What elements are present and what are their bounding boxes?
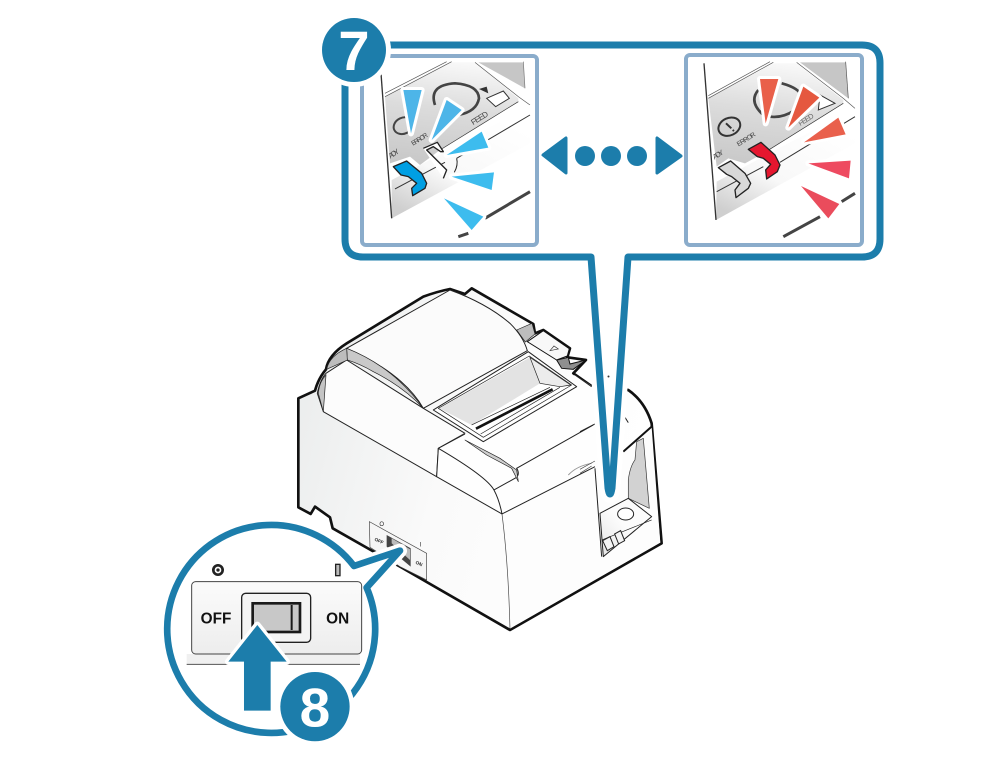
rocker switch xyxy=(242,593,311,642)
alternating arrows xyxy=(543,138,681,173)
control panel, red state xyxy=(704,62,855,237)
ready lamp off xyxy=(718,161,751,198)
control panel, blue state: ERROR xyxy=(410,132,430,147)
receipt window xyxy=(433,352,577,442)
left hinge shadow xyxy=(327,348,347,369)
power switch panel: ON xyxy=(415,560,424,568)
control panel, red state: FEED xyxy=(797,111,815,128)
printer silhouette xyxy=(298,288,662,630)
error lamp red xyxy=(748,142,780,179)
upper left housing xyxy=(317,360,465,477)
panel: error lamp flashing red xyxy=(686,55,862,245)
cover release lever xyxy=(527,331,586,369)
inset circle with pointer xyxy=(167,525,400,733)
switch plate xyxy=(187,582,362,665)
switch plate: ON xyxy=(326,610,349,627)
power switch panel: OFF xyxy=(374,537,384,545)
top cover xyxy=(347,290,527,408)
ready lamp blue xyxy=(393,161,427,196)
housing highlight fin xyxy=(465,440,518,482)
dashed edge xyxy=(783,193,855,237)
cover shadow xyxy=(347,348,423,408)
control panel, blue state xyxy=(381,62,530,237)
control panel, red state: ERROR xyxy=(736,131,757,148)
panel: ready lamp flashing blue xyxy=(362,56,537,245)
top right housing xyxy=(437,375,595,514)
dashed edge xyxy=(458,192,530,237)
badge: step 8 xyxy=(276,667,354,746)
red flash rays xyxy=(760,79,851,218)
error lamp off xyxy=(423,142,447,178)
rear gray step xyxy=(517,323,535,342)
badge: step 7: 7 xyxy=(338,19,370,82)
control panel, red state: ADY xyxy=(711,148,725,161)
control panel, blue state: FEED xyxy=(469,109,490,127)
right face of printer xyxy=(502,427,660,629)
front recess xyxy=(580,417,652,557)
switch plate: OFF xyxy=(201,610,231,627)
blue flash rays xyxy=(403,90,494,230)
badge: step 8: 8 xyxy=(300,677,330,739)
power switch panel: I xyxy=(419,543,421,549)
badge: step 7 xyxy=(317,13,391,87)
inset: power switch callout xyxy=(167,525,400,746)
off and on symbols xyxy=(213,564,340,576)
up arrow xyxy=(228,625,287,711)
power switch panel xyxy=(369,522,427,580)
callout 7 frame with pointer xyxy=(345,45,880,494)
printer illustration xyxy=(298,288,662,630)
power switch panel: O xyxy=(379,522,384,528)
control panel, blue state: ADY xyxy=(386,147,401,160)
